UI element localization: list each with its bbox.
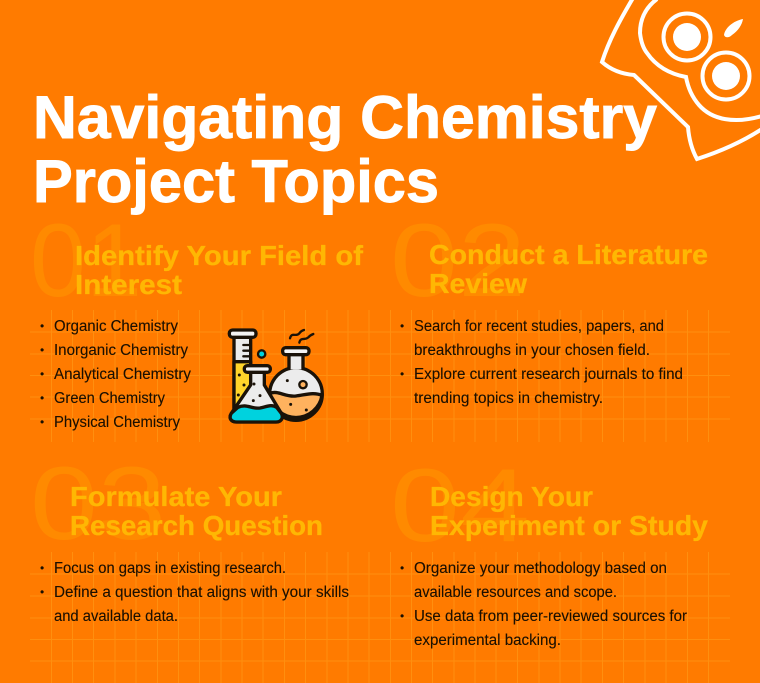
list 03: • [40, 561, 44, 575]
heading 02 [429, 239, 708, 299]
list 04: experimental backing. [414, 632, 561, 649]
test tube [229, 330, 256, 408]
heading 02: Conduct a Literature [429, 239, 708, 270]
list 01: • [40, 319, 44, 333]
list 02: Search for recent studies, papers, and [414, 318, 664, 335]
list 01: Physical Chemistry [54, 414, 180, 431]
list 01: • [40, 415, 44, 429]
list 04: Use data from peer-reviewed sources for [414, 608, 687, 625]
list 01: • [40, 343, 44, 357]
heading 04 [430, 481, 709, 541]
title: Project Topics [33, 148, 439, 215]
heading 02: Review [429, 268, 528, 299]
panel: 03 formulate your research question [30, 446, 349, 625]
heading 03: Formulate Your [70, 481, 282, 512]
bubble [258, 350, 265, 358]
list 01: Inorganic Chemistry [54, 342, 188, 359]
panel: 02 conduct a literature review [390, 203, 708, 407]
list 04: Organize your methodology based on [414, 560, 667, 577]
heading 01: Identify Your Field of [75, 240, 364, 271]
round flask [270, 330, 322, 420]
list 04: • [400, 561, 404, 575]
heading 01 [75, 240, 364, 300]
list 01: • [40, 391, 44, 405]
icon: chemistry flasks [229, 330, 322, 422]
list 03: and available data. [54, 608, 178, 625]
heading 04: Experiment or Study [430, 510, 709, 541]
heading 03 [70, 481, 323, 541]
list 02: breakthroughs in your chosen field. [414, 342, 650, 359]
list 04: available resources and scope. [414, 584, 617, 601]
title: Navigating Chemistry [33, 84, 658, 151]
list 04: • [400, 609, 404, 623]
title [33, 84, 658, 215]
list 02: trending topics in chemistry. [414, 390, 603, 407]
heading 04: Design Your [430, 481, 593, 512]
list 02: Explore current research journals to find [414, 366, 683, 383]
number 04: 04 [390, 448, 530, 564]
list 03: • [40, 585, 44, 599]
list 03: Focus on gaps in existing research. [54, 560, 286, 577]
heading 01: Interest [75, 269, 182, 300]
list 01: Analytical Chemistry [54, 366, 191, 383]
list 03: Define a question that aligns with your skills [54, 584, 349, 601]
list 02 [400, 318, 683, 407]
icon: game controller outline [602, 0, 760, 159]
list 04 [400, 560, 687, 649]
number 01: 01 [30, 203, 142, 319]
panel: 01 identify your field of interest [30, 203, 364, 431]
panel: 04 design your experiment or study [390, 448, 709, 649]
list 01: Organic Chemistry [54, 318, 178, 335]
heading 03: Research Question [70, 510, 323, 541]
list 01: • [40, 367, 44, 381]
number 03: 03 [30, 446, 166, 562]
conical flask [230, 366, 282, 422]
list 01 [40, 318, 191, 431]
list 02: • [400, 319, 404, 333]
list 03 [40, 560, 349, 625]
list 01: Green Chemistry [54, 390, 165, 407]
list 02: • [400, 367, 404, 381]
number 02: 02 [390, 203, 526, 319]
